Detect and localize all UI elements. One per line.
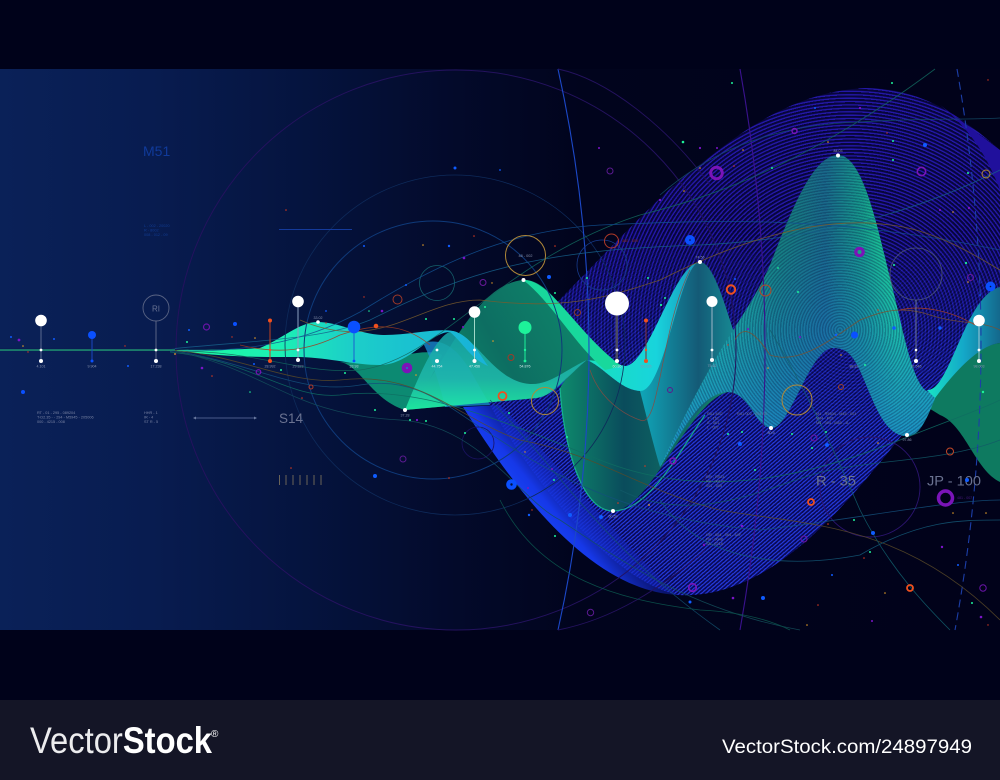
label: R - 35: R - 35: [816, 472, 856, 488]
small data blocks right: L - 007: [707, 426, 719, 430]
small data text block: HHR - 1: [144, 411, 158, 415]
pin: circle 916: 97.545: [910, 364, 922, 368]
small data blocks right: S - 001: [707, 421, 719, 425]
tick marks: [280, 475, 321, 485]
small data blocks right: M04 - P03: [816, 416, 834, 420]
purple annotated ring: 481 - 007: [957, 496, 972, 500]
image id: VectorStock.com/24897949: [722, 737, 972, 758]
lit lower band: [405, 331, 587, 410]
circle annotations: [506, 236, 546, 276]
wave point labels: 74.56: [696, 256, 704, 260]
pin: RI circle 17.238: [143, 295, 169, 368]
small data blocks right: OR - RS24: [706, 475, 725, 479]
pin: 44.754: 44.754: [432, 364, 442, 368]
heading label: M51: M51: [143, 143, 170, 159]
pin: 47.456: 47.456: [469, 364, 480, 368]
left data text block: T-D2.35 - - 294 - M5945 - 205006: [37, 416, 94, 420]
big wave peak: [660, 155, 937, 467]
small data blocks right: M5 - 004 - M45 - 1L: [816, 421, 849, 425]
peak label: 33.02: [314, 316, 322, 324]
pin: white 979: [973, 315, 985, 368]
scattered data particles: blue: [10, 107, 981, 604]
scattered data particles: gold and red: [22, 79, 989, 626]
pin: 28.992: 28.992: [264, 364, 276, 368]
pin: white 712: [706, 296, 718, 368]
pin: 29.823: [292, 296, 304, 368]
lower-left teal ribbon: [340, 352, 442, 410]
pin: 54.876: 54.876: [520, 364, 530, 368]
small blue data text: [144, 224, 170, 237]
wave point labels: [400, 149, 912, 518]
main dark-blue panel: [0, 69, 1000, 630]
pin: RI circle 17.238: RI: [152, 304, 160, 314]
green mesh under first hump: [560, 262, 728, 511]
right wave section: cyan band: [927, 287, 1000, 398]
orange annotated circle: [604, 234, 638, 248]
green mesh bright edge lower-left: [560, 388, 705, 511]
left data text block: 000 - 4215 - 008: [37, 420, 65, 424]
wave point markers: [403, 154, 909, 513]
label: JP - 100: JP - 100: [927, 472, 981, 488]
pin: 29.823: 29.823: [292, 364, 304, 368]
wave point labels: 37.28: [400, 414, 410, 418]
teal mesh hump: [640, 262, 772, 467]
small blue data text: 008 - 012 - 09: [144, 233, 168, 237]
blue dash line: [279, 228, 352, 230]
pin: large white 617: [605, 292, 629, 368]
pin: RI circle 17.238: 17.238: [150, 364, 162, 368]
small data blocks right: RA1 002 - 004 S2: [737, 412, 767, 416]
pin: blue 354: [348, 321, 360, 368]
filled accent nodes: [21, 235, 996, 490]
small data blocks right: OR - 004 - 064 - 44F: [706, 533, 742, 537]
small data blocks right: RA - 00171: [706, 480, 725, 484]
blue wire mesh envelope: [487, 88, 1000, 595]
logo: VectorStock: VectorStock: [30, 720, 212, 761]
small data blocks right: 001 - 509: [706, 484, 722, 488]
label: S14: S14: [279, 411, 304, 426]
wave point labels: 80.9: [768, 431, 774, 435]
pin: orange 646: 65.025: [640, 364, 652, 368]
small data text block: ST R - 5: [144, 420, 158, 424]
wave point labels: 97.86: [902, 438, 912, 442]
small data blocks right: [706, 412, 856, 546]
wave point labels: 84.03: [834, 149, 842, 153]
small data blocks right: SA - 0218: [706, 542, 723, 546]
small data blocks right: FR - 0048: [706, 538, 723, 542]
small blue data text: L - 002 - 20020: [144, 224, 170, 228]
left data text block: [37, 411, 94, 424]
pin: 28.992: [264, 318, 276, 368]
scattered data particles: purple: [18, 107, 982, 622]
small data text block: [144, 411, 158, 424]
wave point labels: 88.83: [850, 364, 858, 368]
bright green and cyan ribbon on left: [170, 322, 488, 366]
big concentric arcs: [176, 69, 981, 630]
pin: 47.456: [469, 306, 480, 368]
pin: 4.101: [35, 315, 47, 368]
orange annotated circle: 480 - 509: [622, 239, 638, 243]
pin: white 712: 75.62: [708, 364, 716, 368]
small data blocks right: M1 - R5404 - M45 - 001: [816, 412, 856, 416]
pin: blue 354: 33.93: [350, 364, 358, 368]
arrow: [193, 416, 257, 420]
pin: 9.904: [88, 331, 96, 368]
wave point labels: 60.59: [608, 514, 618, 518]
hump bright right edge: [523, 280, 622, 370]
left data text block: RT - 01 - 295 - 089204: [37, 411, 75, 415]
pin: circle 916: [910, 300, 922, 368]
right wave section: dark green mesh: [927, 343, 1000, 482]
small data text block: IR - 4: [144, 416, 153, 420]
pin: white 979: 98.003: [974, 364, 984, 368]
purple annotated ring: [938, 491, 972, 505]
footer bar: [0, 700, 1000, 780]
pin: 44.754: [432, 349, 442, 368]
pin: 9.904: 9.904: [88, 364, 96, 368]
peak label: 33.02: 33.02: [314, 316, 322, 320]
logo registered mark: ®: [211, 729, 219, 740]
thin data lines: [170, 69, 1000, 630]
rings: [204, 128, 990, 616]
circle annotations: 48 - 002: [519, 254, 532, 258]
scattered data particles: green: [186, 82, 984, 604]
pin: orange 646: [640, 318, 652, 368]
small data blocks right: RA1 M47: [707, 412, 723, 416]
cyan band rising to hump: [587, 262, 700, 391]
pin: 4.101: 4.101: [36, 364, 46, 368]
blue tail of wave: [463, 405, 677, 595]
middle green hump: [405, 280, 617, 410]
horizontal axis line: [0, 348, 175, 351]
small blue data text: R - 8002: [144, 228, 159, 232]
pin: 54.876: [518, 321, 532, 368]
pin: large white 617: 60.86: [612, 364, 622, 368]
small data blocks right: T - 161: [707, 416, 719, 420]
blue overlap: [423, 341, 490, 407]
